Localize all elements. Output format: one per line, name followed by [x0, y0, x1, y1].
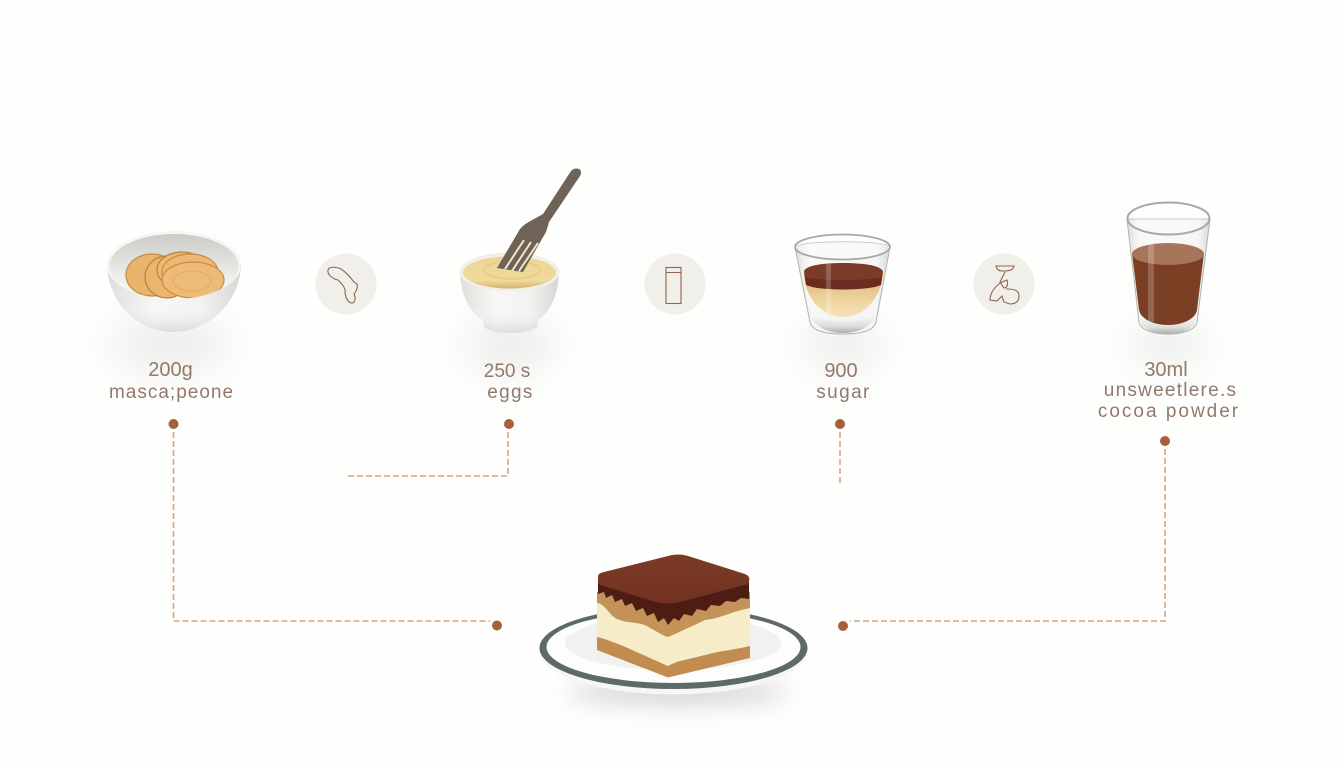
- cake sponge: [597, 634, 750, 678]
- plate: [540, 608, 808, 694]
- plate shadow: [568, 680, 788, 704]
- label: 250 s eggs: 250 s: [484, 361, 530, 382]
- label: 200g mascarpone: masca;peone: [109, 382, 234, 403]
- label: 200g mascarpone: [109, 359, 234, 403]
- icon: cocoa lumps badge: [974, 254, 1034, 314]
- label: 200g mascarpone: 200g: [148, 359, 193, 381]
- connector: eggs: [345, 419, 514, 476]
- label: 30ml unsweetened cocoa powder: cocoa powder: [1098, 401, 1240, 422]
- label: 30ml unsweetened cocoa powder: 30ml: [1144, 359, 1188, 381]
- label: 250 s eggs: eggs: [487, 382, 534, 403]
- icon: glass of cocoa: [1127, 202, 1210, 367]
- connector: cocoa powder to tiramisu: [838, 436, 1170, 631]
- icon: ginger outline badge: [316, 254, 376, 314]
- connector: mascarpone to tiramisu: [168, 419, 502, 630]
- label: 250 s eggs: [484, 361, 534, 403]
- icon: bowl of biscuits: [107, 231, 241, 369]
- icon: layered glass: [795, 234, 890, 367]
- icon: custard bowl with fork: [460, 169, 581, 367]
- label: 900 sugar: sugar: [816, 382, 871, 403]
- connector: sugar: [835, 419, 845, 486]
- cake chocolate side: [598, 578, 749, 625]
- label: 30ml unsweetened cocoa powder: unsweetlere.s: [1104, 380, 1237, 401]
- label: 900 sugar: 900: [824, 360, 858, 382]
- label: 900 sugar: [816, 360, 871, 403]
- icon: tiramisu on plate: [540, 554, 808, 704]
- icon: glass badge: [644, 254, 706, 314]
- cake chocolate top: [598, 554, 749, 604]
- icon: fork: [497, 169, 581, 272]
- cake coffee layer: [597, 592, 750, 637]
- label: 30ml unsweetened cocoa powder: [1098, 359, 1240, 422]
- cake cream: [597, 600, 750, 666]
